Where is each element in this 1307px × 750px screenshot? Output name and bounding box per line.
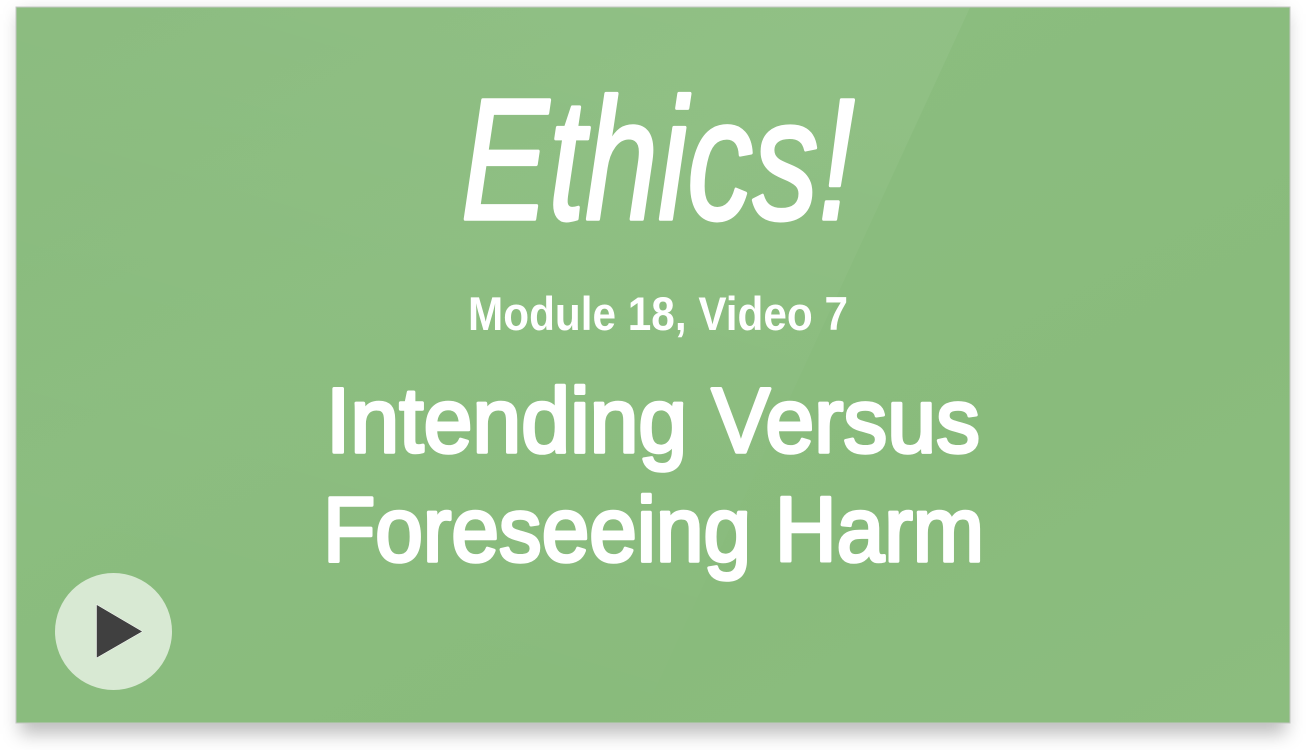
subtitle: module and video number: Module 18, Video 7 xyxy=(468,287,848,340)
icon: play button xyxy=(55,573,172,690)
title: Ethics!: Ethics! xyxy=(461,62,855,256)
heading: lesson title: Intending Versus xyxy=(326,370,980,472)
heading: lesson title xyxy=(323,370,984,581)
heading: lesson title: Foreseeing Harm xyxy=(323,479,984,581)
